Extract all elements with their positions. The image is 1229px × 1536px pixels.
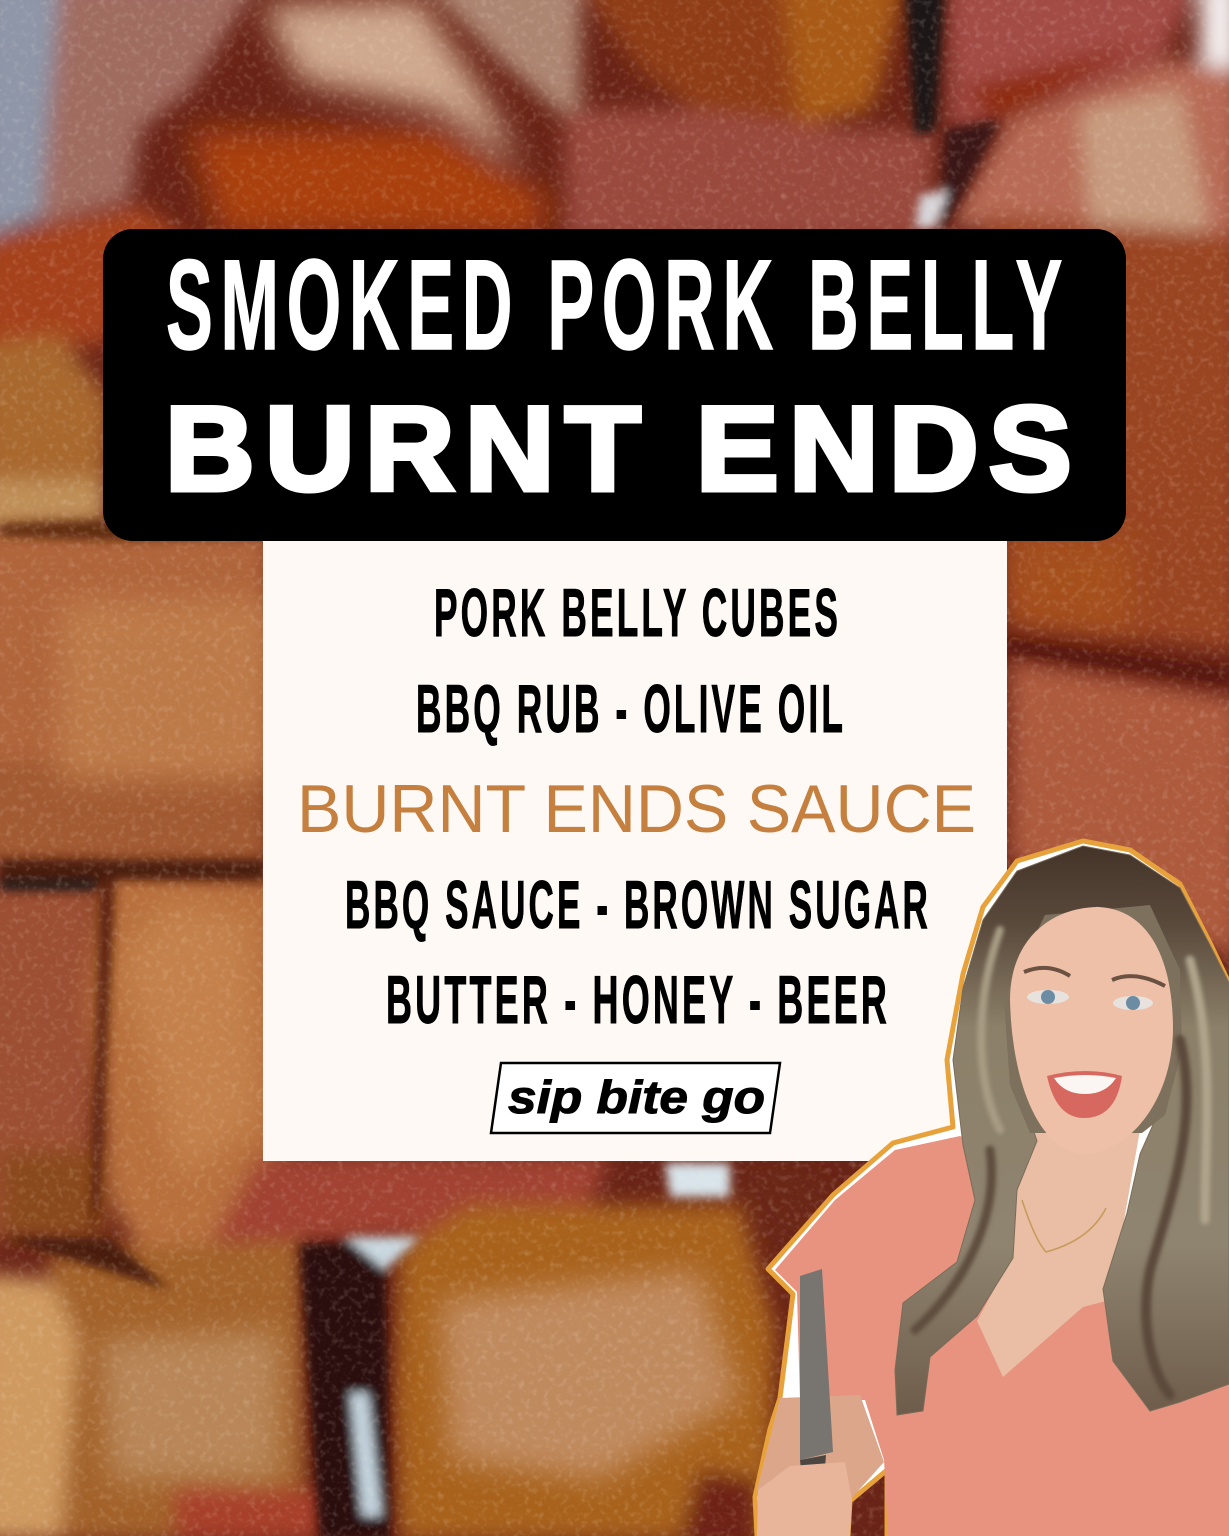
forearm: [757, 1395, 884, 1500]
logo: sip bite go: sip bite go: [508, 1071, 765, 1123]
hair shading: [915, 930, 1207, 1395]
face: [1010, 907, 1173, 1154]
subheading: burnt ends sauce: BURNT ENDS SAUCE: [297, 771, 976, 847]
dress: [775, 1136, 1229, 1536]
portrait: woman holding a knife: [755, 841, 1229, 1536]
bottom chunks: [50, 1240, 305, 1536]
dark seams and foil gaps: [905, 0, 945, 135]
ingredient: bbq rub and olive oil: BBQ RUB - OLIVE OIL: [416, 671, 846, 747]
panel: ingredients list: [263, 541, 1007, 1161]
heading line 2: BURNT ENDS: [165, 382, 1082, 516]
cut-out outline: [755, 841, 1229, 1536]
top row chunks: [0, 0, 70, 240]
eyes: [1024, 968, 1165, 1010]
glazed highlights: [262, 0, 520, 165]
neck and chest: [977, 1130, 1140, 1377]
hand: [757, 1462, 852, 1536]
lower left chunks: [0, 885, 95, 1240]
logo: sip bite go: [491, 1063, 780, 1133]
right column chunks: [985, 215, 1229, 650]
hair behind face: [1004, 905, 1182, 1133]
ingredient: pork belly cubes: PORK BELLY CUBES: [434, 575, 841, 651]
knife: [800, 1269, 833, 1480]
hair: [895, 846, 1229, 1415]
smile: [1047, 1071, 1122, 1118]
title banner: [103, 229, 1126, 541]
left column chunks: [0, 205, 190, 345]
necklace: [1022, 1200, 1106, 1252]
